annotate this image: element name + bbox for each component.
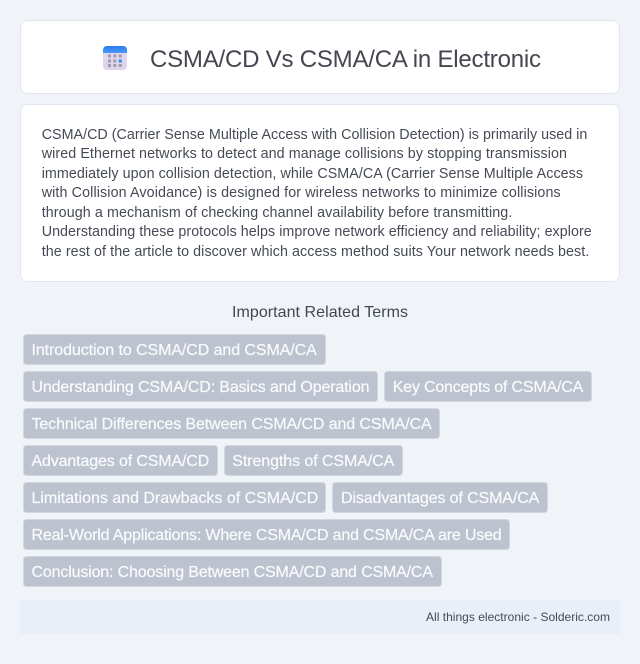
tag: understanding: Understanding CSMA/CD: Basics and Operation	[32, 379, 370, 396]
panel: description	[20, 104, 620, 282]
description text: immediately upon collision detection, while CSMA/CA (Carrier Sense Multiple Access	[42, 166, 583, 182]
tag: advantages: Advantages of CSMA/CD	[32, 453, 209, 470]
icon: calendar	[103, 46, 127, 70]
tag: advantages	[24, 446, 218, 476]
tag: disadvantages: Disadvantages of CSMA/CA	[341, 490, 540, 507]
tag: disadvantages	[332, 482, 548, 512]
header panel	[20, 20, 620, 94]
description text: the rest of the article to discover which access method suits Your network needs best.	[42, 244, 589, 260]
tag: introduction: Introduction to CSMA/CD and CSMA/CA	[32, 342, 317, 359]
tag: understanding	[24, 372, 378, 402]
tag list	[24, 334, 592, 586]
tag: limitations	[24, 482, 326, 512]
tag: strengths: Strengths of CSMA/CA	[232, 453, 395, 470]
tag: key concepts: Key Concepts of CSMA/CA	[393, 379, 584, 396]
description text: Understanding these protocols helps improve network efficiency and reliability; explore	[42, 224, 592, 240]
tag: real-world applications: Real-World Applications: Where CSMA/CD and CSMA/CA are Used	[32, 527, 502, 544]
footer credit: All things electronic - Solderic.com	[426, 610, 610, 624]
description text	[41, 127, 592, 260]
tag: introduction	[24, 334, 326, 364]
tag: technical differences: Technical Differences Between CSMA/CD and CSMA/CA	[32, 416, 432, 433]
tag: limitations: Limitations and Drawbacks of CSMA/CD	[32, 490, 318, 507]
tag: strengths	[224, 446, 402, 476]
tag: real-world applications	[24, 520, 510, 550]
title: CSMA/CD Vs CSMA/CA in Electronic	[150, 46, 541, 73]
footer	[20, 600, 620, 634]
tag: conclusion: Conclusion: Choosing Between CSMA/CD and CSMA/CA	[32, 564, 433, 581]
tag: conclusion	[24, 556, 442, 586]
description text: CSMA/CD (Carrier Sense Multiple Access with Collision Detection) is primarily used in	[42, 127, 587, 143]
heading: related terms: Important Related Terms	[232, 304, 408, 321]
description text: wired Ethernet networks to detect and manage collisions by stopping transmission	[41, 146, 567, 162]
description text: with Collision Avoidance) is designed for wireless networks to minimize collisions	[41, 185, 561, 201]
tag: technical differences	[24, 408, 440, 438]
tag: key concepts	[384, 372, 592, 402]
description text: through a mechanism of checking channel availability before transmitting.	[42, 205, 512, 221]
